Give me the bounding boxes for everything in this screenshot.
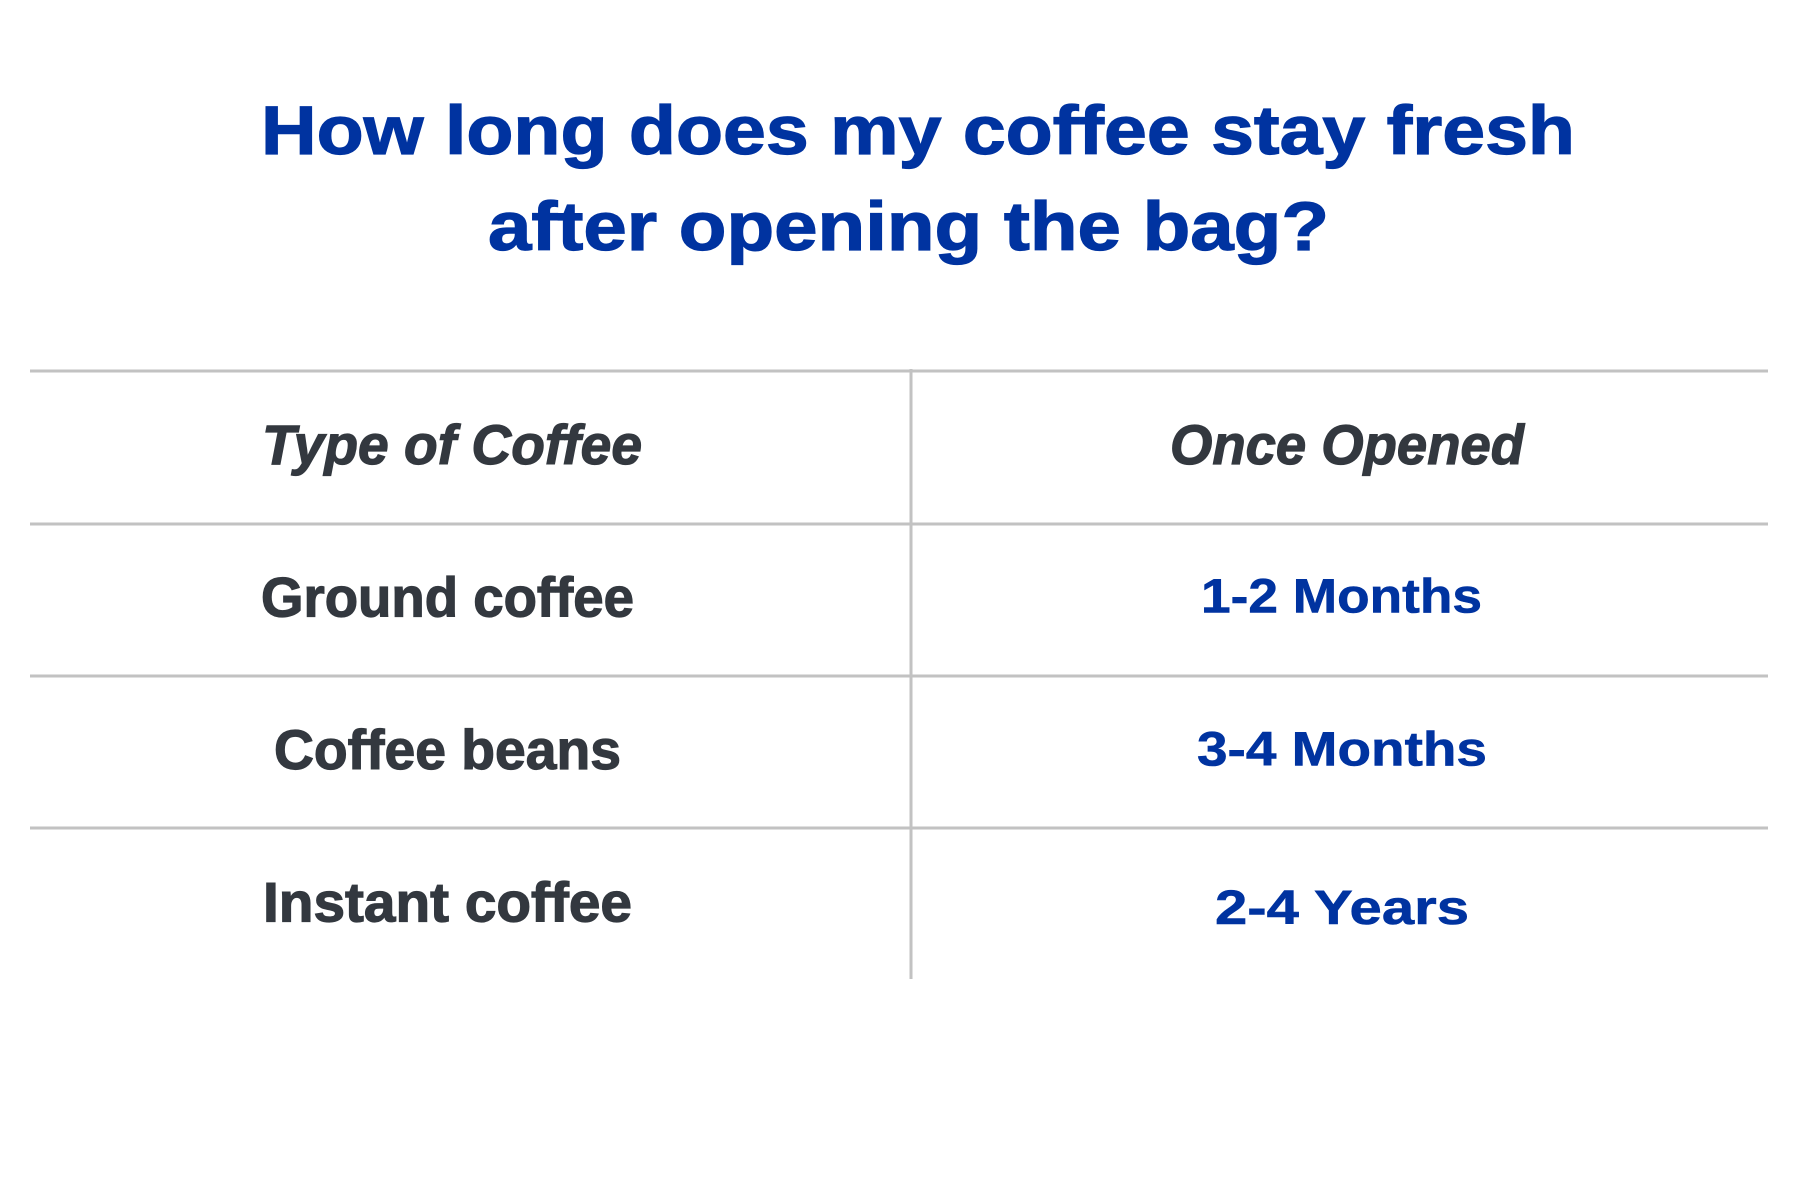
title: How long does my coffee stay fresh	[261, 92, 1575, 169]
row: coffee beans: 3-4 Months	[1197, 724, 1487, 776]
table	[30, 369, 1768, 979]
column header: type of coffee: Type of Coffee	[262, 413, 642, 476]
title	[261, 92, 1575, 265]
row: instant coffee	[263, 870, 1469, 935]
row: ground coffee	[261, 566, 1482, 628]
row: instant coffee: Instant coffee	[263, 870, 632, 934]
row: coffee beans	[274, 718, 1487, 781]
row: coffee beans: Coffee beans	[274, 718, 621, 781]
row: instant coffee: 2-4 Years	[1215, 882, 1469, 935]
row: ground coffee: Ground coffee	[261, 566, 634, 628]
table grid lines	[30, 369, 1768, 979]
row: ground coffee: 1-2 Months	[1201, 570, 1482, 624]
title: after opening the bag?	[488, 188, 1329, 265]
column header: once opened: Once Opened	[1170, 413, 1526, 476]
